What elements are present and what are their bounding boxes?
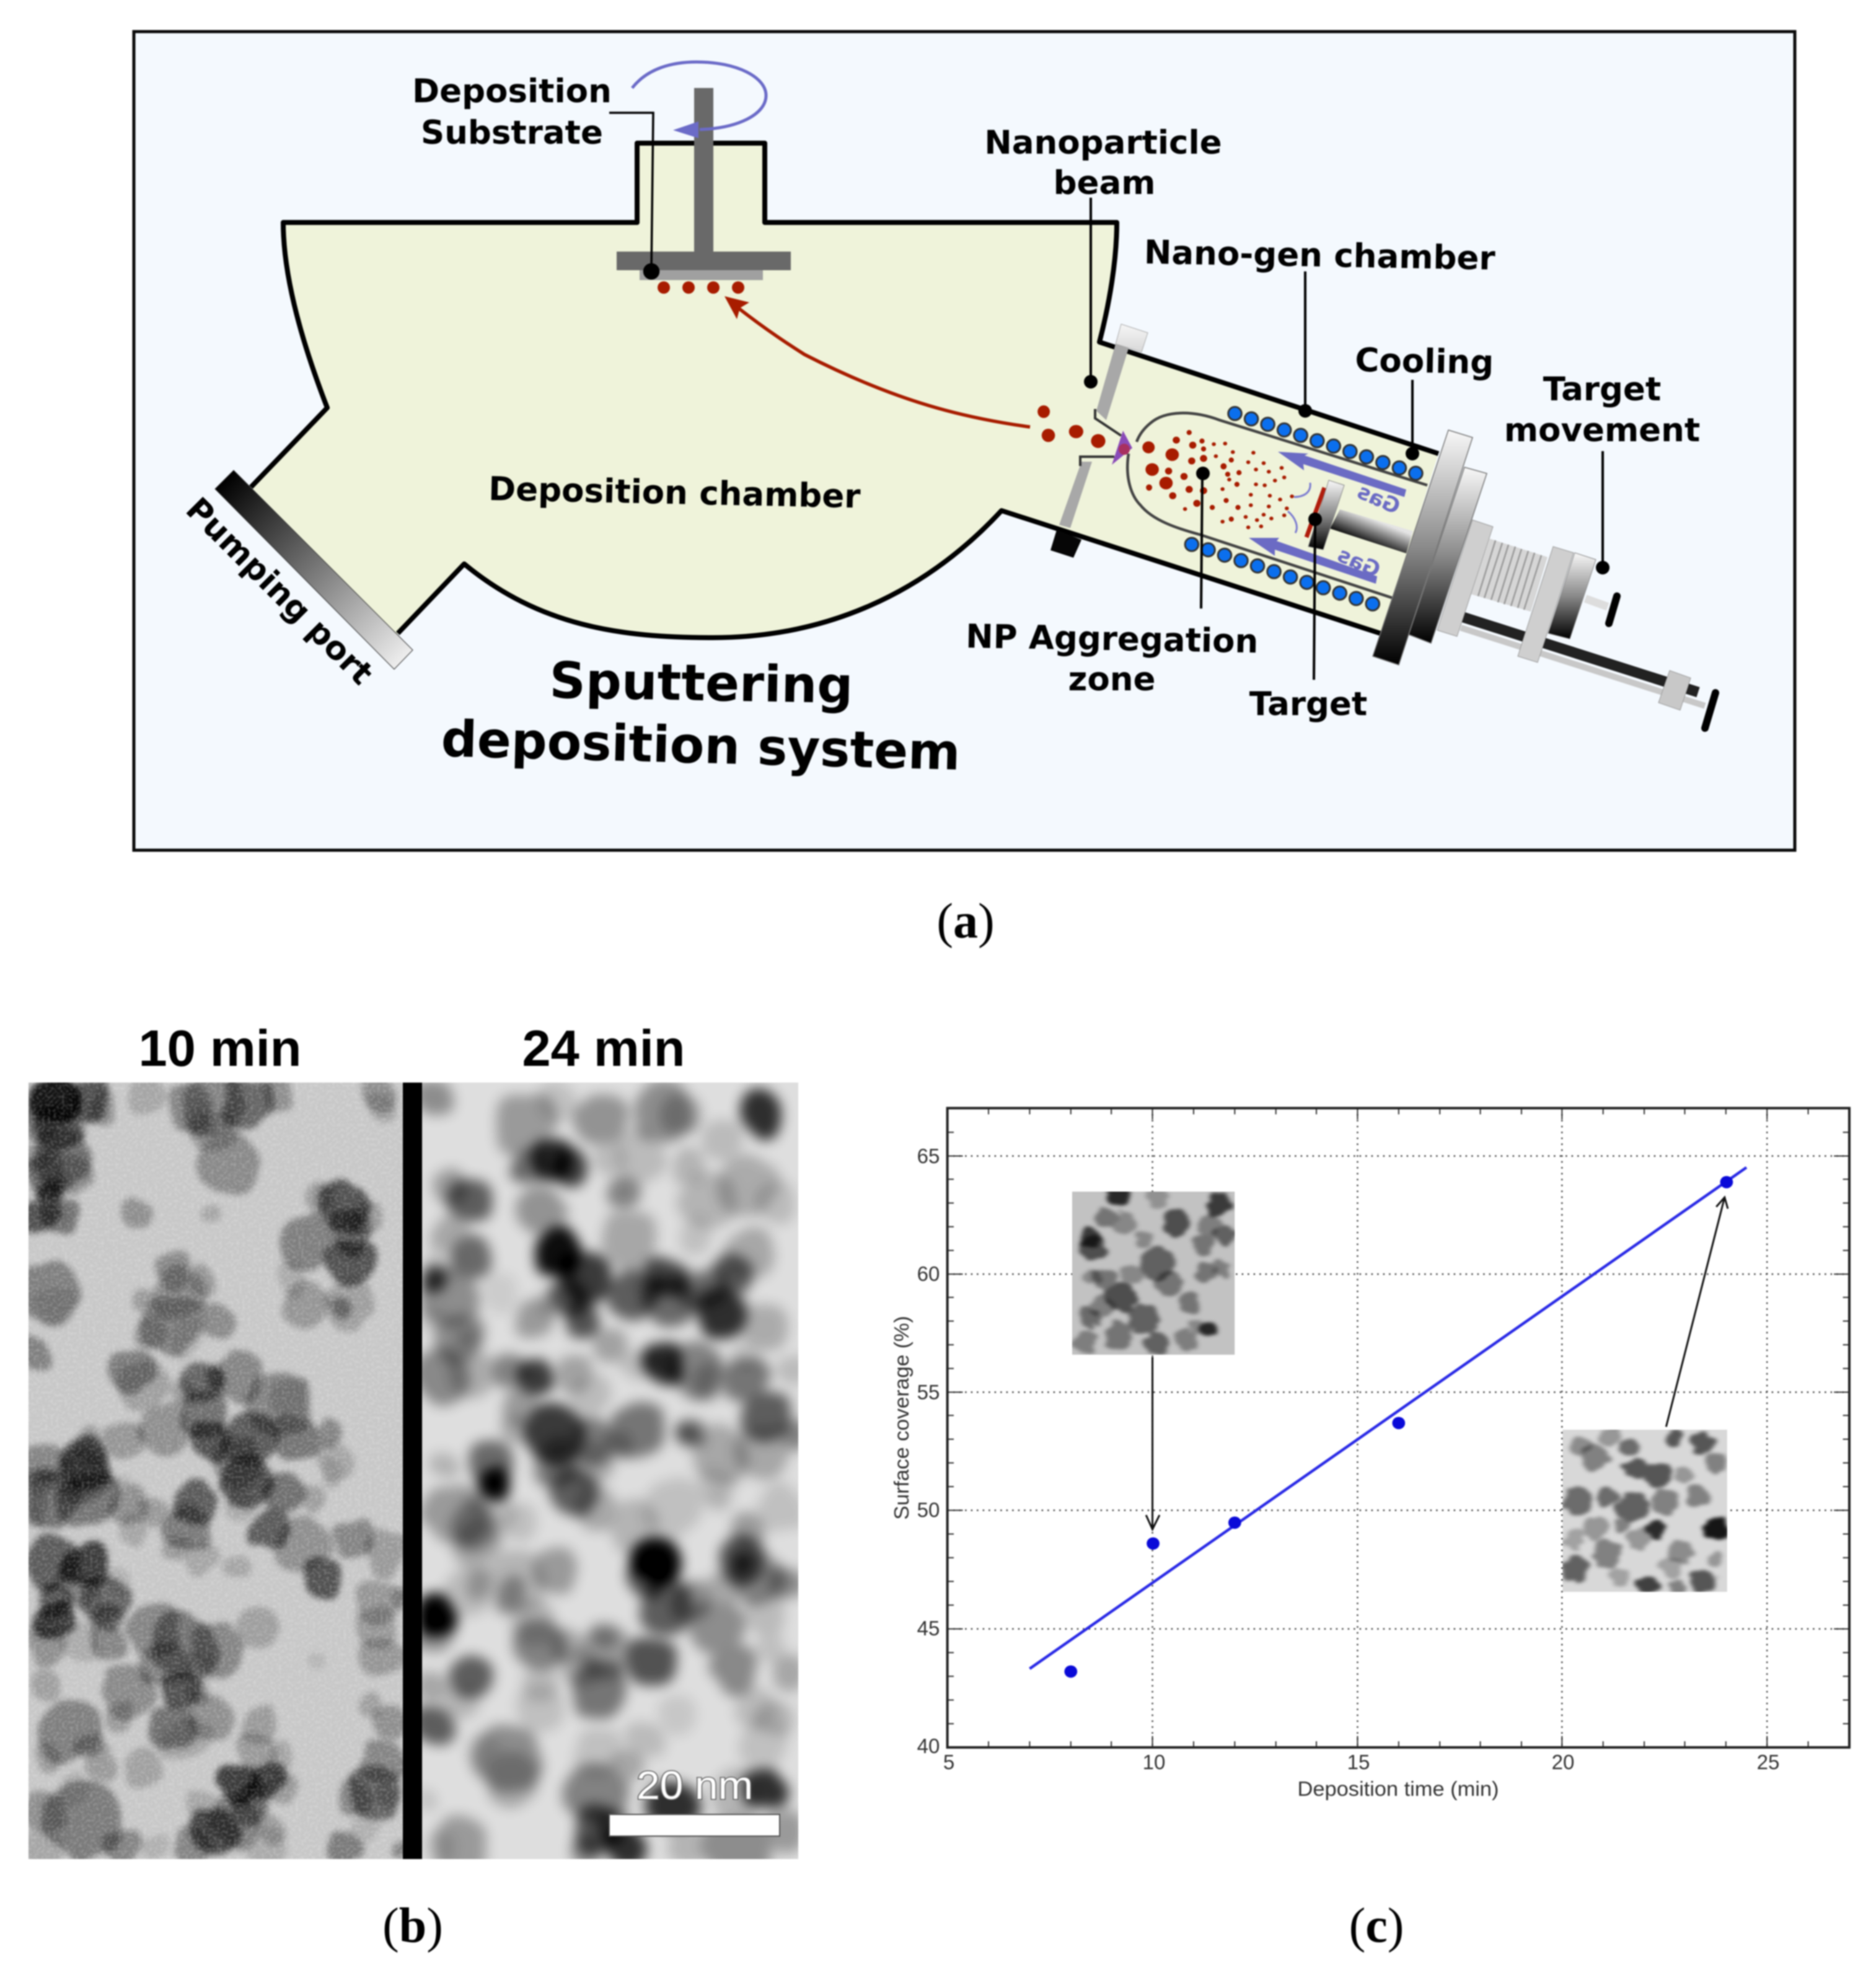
label: target movement: movement [1504,411,1700,449]
label: target movement [1504,371,1700,449]
target shaft [1330,509,1413,553]
x axis tick labels: 25 [1757,1751,1779,1774]
y axis tick labels [917,1145,940,1757]
y axis tick labels: 40 [917,1734,940,1757]
nozzle [1080,409,1121,466]
cooling coils bottom [1185,538,1380,610]
target holder [1308,480,1344,550]
nanoparticles and coils [1037,405,1422,610]
rod handle [1705,693,1715,728]
lower guide rods [1461,617,1705,706]
caption b: (b) [382,1899,443,1953]
nanoparticles in aggregation zone [1142,430,1294,529]
label: target movement: Target [1543,371,1661,408]
label: deposition substrate: Deposition [412,73,612,110]
aperture foot [1050,530,1081,558]
substrate holder plate [617,252,791,270]
y axis title: Surface coverage (%) [890,1316,913,1519]
deposition chamber body [251,143,1438,638]
gas label bottom: Gas [1334,542,1384,583]
x axis tick labels: 5 [943,1751,954,1774]
aperture lower plate [1059,462,1092,528]
arrow from 10 min inset [1146,1357,1160,1529]
panel: surface coverage chart [890,1108,1849,1800]
pointer: aggregation zone [1196,467,1210,609]
panel: TEM image 10 min [17,1074,410,1865]
movement block [1548,553,1596,639]
title: Sputtering [549,652,853,715]
label: nano-gen chamber: Nano-gen chamber [1144,234,1495,278]
aperture top cap [1116,324,1148,352]
x axis tick labels [943,1751,1779,1774]
label: NP aggregation zone: zone [1068,661,1155,698]
pointer: target movement [1596,451,1610,574]
y axis tick labels: 55 [917,1381,940,1404]
bellows [1471,539,1548,612]
nozzle cone particle [1112,431,1132,465]
chamber outline [251,143,1438,638]
label: deposition substrate [412,73,612,152]
nanoparticle trajectory arrow [724,296,1030,427]
y axis tick labels: 50 [917,1498,940,1521]
gridlines [948,1108,1849,1747]
label: deposition chamber: Deposition chamber [488,470,861,516]
caption a: (a) [936,894,995,949]
data points [1064,1176,1733,1677]
pumping port plate [215,470,413,669]
plot frame [948,1108,1849,1747]
title [441,652,961,782]
panel: sputtering deposition system schematic [134,32,1795,850]
divider bar [403,1083,422,1859]
tick marks [948,1108,1849,1747]
gas flow arrow top [1278,452,1406,497]
heading: 10 min: 10 min [139,1019,301,1077]
label: nanoparticle beam: Nanoparticle [984,124,1222,162]
flange 2 [1409,467,1487,643]
fit line [1029,1167,1746,1669]
title: deposition system [441,710,961,782]
x axis title: Deposition time (min) [1298,1777,1499,1800]
pointer: nano-gen chamber [1298,271,1312,418]
pointer: nanoparticle beam [1084,198,1098,389]
x axis tick labels: 20 [1552,1751,1574,1774]
inner aggregation tube [1127,413,1427,598]
panel: TEM image 24 min [416,1079,806,1878]
label: deposition substrate: Substrate [421,114,603,152]
y axis tick labels: 45 [917,1617,940,1640]
gas flow arrow bottom [1249,538,1377,584]
pointer: target [1308,512,1322,680]
label: cooling: Cooling [1355,341,1494,382]
nanoparticles in beam [1037,405,1106,448]
x axis tick labels: 10 [1143,1751,1165,1774]
y axis tick labels: 65 [917,1145,940,1167]
label: NP aggregation zone [966,618,1259,698]
heading: 24 min: 24 min [522,1019,685,1077]
y axis tick labels: 60 [917,1262,940,1285]
arrow from 24 min inset [1666,1197,1728,1427]
scale bar [609,1814,780,1836]
x axis tick labels: 15 [1347,1751,1370,1774]
movement plate [1518,547,1574,662]
rotation arrow [632,62,766,138]
label: target: Target [1249,685,1367,723]
label: nanoparticle beam [984,124,1222,202]
substrate pointer [609,113,658,279]
target actuator [1585,596,1617,623]
flange 1 [1373,430,1473,665]
scale bar label: 20 nm [636,1763,753,1808]
rod collar [1658,670,1691,710]
gas label top: Gas [1354,479,1404,520]
small flow arrows [1288,483,1310,533]
cooling coils top [1228,407,1422,480]
deposited nanoparticles [658,281,744,294]
label: NP aggregation zone: NP Aggregation [966,618,1259,661]
inset: 24 min TEM thumbnail [1562,1427,1728,1593]
aperture upper plate [1096,344,1129,420]
substrate holder rod [694,88,713,252]
flange 3 [1437,520,1493,636]
target [1306,488,1324,537]
pointer: cooling [1406,380,1419,460]
deposition substrate [640,270,763,280]
caption c: (c) [1349,1899,1404,1953]
inset: 10 min TEM thumbnail [1072,1184,1235,1355]
label: nanoparticle beam: beam [1054,164,1155,202]
label: pumping port: Pumping port [178,491,380,692]
